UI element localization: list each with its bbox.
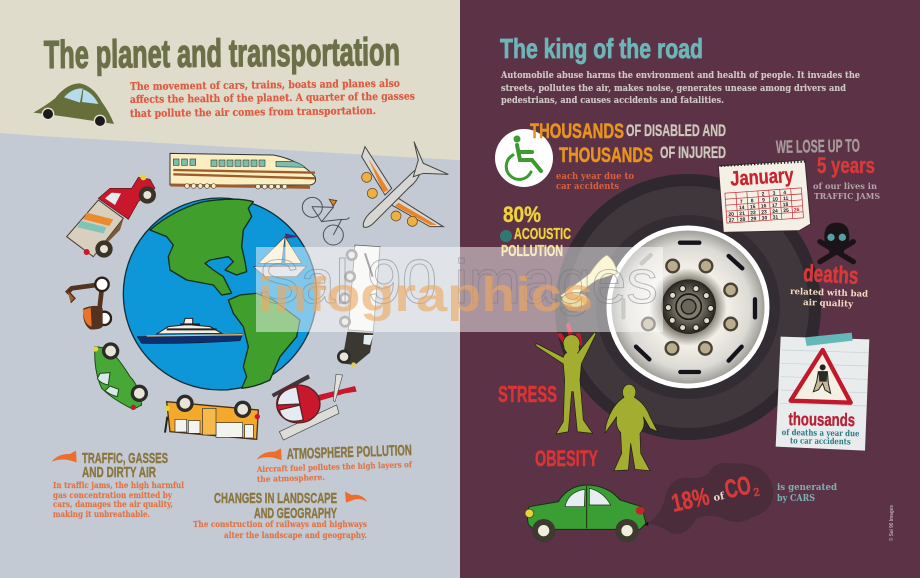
panel: king of the road background bbox=[460, 0, 920, 578]
icon: airplane bbox=[362, 142, 448, 227]
stat: we lose up to 5 years: of our lives in bbox=[813, 182, 877, 192]
icon: school bus bbox=[165, 396, 260, 439]
icon: january calendar: January bbox=[730, 164, 795, 191]
credit: copyright: © Sal 90 Images bbox=[888, 505, 895, 541]
text: is generated by cars bbox=[777, 482, 837, 504]
stat: 18% of CO2 bbox=[668, 468, 762, 518]
note: traffic, gasses and dirty air: In traffic jams, the high harmful bbox=[53, 480, 184, 490]
text: planet introduction: affects the health of the planet. A quarter of the gasses bbox=[130, 91, 415, 106]
icon: january calendar: 28 bbox=[740, 217, 746, 223]
note: changes in landscape and geography bbox=[193, 490, 367, 540]
text: king of the road introduction bbox=[500, 70, 860, 106]
icon: january calendar: 9 bbox=[762, 197, 765, 204]
text: king of the road introduction: Automobile abuse harms the environment and health of people. It invades the bbox=[500, 70, 860, 81]
stat: 80% acoustic pollution: 80% bbox=[503, 202, 541, 227]
icon: olive car bbox=[33, 83, 114, 127]
icon: wheelchair badge bbox=[495, 129, 553, 187]
arrow: atmosphere note bbox=[257, 448, 282, 460]
watermark: infographics: infographics bbox=[258, 269, 593, 322]
icon: january calendar: 14 bbox=[739, 205, 745, 211]
label: obesity: OBESITY bbox=[535, 446, 598, 471]
text: planet introduction bbox=[130, 78, 415, 120]
stat: thousands disabled and injured: OF DISABLED AND bbox=[626, 121, 726, 140]
note: atmosphere pollution: Aircraft fuel pollutes the high layers of bbox=[256, 459, 412, 474]
note: traffic, gasses and dirty air: cars, damages the air quality, bbox=[53, 499, 173, 509]
icon: helicopter bbox=[272, 374, 357, 440]
text: is generated by cars: by CARS bbox=[777, 493, 815, 504]
icon: january calendar: 3 bbox=[772, 191, 776, 197]
title: the planet and transportation: The planet and transportation bbox=[44, 31, 400, 77]
note: changes in landscape and geography: The construction of railways and highways bbox=[193, 519, 367, 529]
stat: 18% of CO2: of bbox=[712, 491, 726, 504]
icon: january calendar bbox=[718, 160, 811, 232]
note: changes in landscape and geography: alter the landscape and geography. bbox=[224, 530, 367, 540]
stat: deaths related with bad air quality bbox=[790, 260, 868, 310]
note: traffic, gasses and dirty air: making it unbreathable. bbox=[53, 509, 150, 519]
icon: train bbox=[170, 153, 316, 189]
icon: white truck bbox=[338, 245, 380, 367]
stat: we lose up to 5 years: TRAFFIC JAMS bbox=[814, 192, 880, 202]
icon: green car bbox=[525, 485, 648, 539]
stat: 80% acoustic pollution bbox=[500, 202, 571, 260]
note: changes in landscape and geography: CHANGES IN LANDSCAPE bbox=[214, 490, 337, 507]
icon: green car bbox=[93, 344, 146, 410]
icon: january calendar: 17 bbox=[772, 203, 778, 209]
arrow: traffic note bbox=[52, 451, 77, 462]
stat: thousands disabled and injured bbox=[530, 120, 726, 192]
note: pedestrian deaths warning: of deaths a year due bbox=[782, 427, 859, 438]
icon: january calendar: 2 bbox=[762, 191, 765, 198]
note: atmosphere pollution bbox=[256, 442, 412, 484]
arrow: landscape note bbox=[345, 492, 367, 503]
icon: scooter bbox=[67, 278, 111, 329]
illustration: tire and wheel bbox=[555, 174, 821, 440]
text: is generated by cars: is generated bbox=[777, 482, 837, 493]
icon: january calendar: 25 bbox=[783, 208, 789, 214]
note: traffic, gasses and dirty air: TRAFFIC, GASSES bbox=[82, 450, 168, 467]
icon: bicycle bbox=[302, 197, 349, 245]
icon: stressed figure bbox=[536, 325, 596, 434]
icon: exhaust cloud bbox=[648, 463, 773, 534]
note: traffic, gasses and dirty air: AND DIRTY AIR bbox=[82, 464, 156, 481]
icon: january calendar: 20 bbox=[728, 212, 734, 218]
stat: we lose up to 5 years bbox=[776, 136, 880, 202]
stat: we lose up to 5 years: 5 years bbox=[817, 153, 875, 178]
stat: 18% of CO2: 18% bbox=[669, 482, 712, 518]
icon: january calendar: 31 bbox=[773, 215, 779, 221]
text: planet introduction: The movement of cars, trains, boats and planes also bbox=[130, 78, 400, 93]
icon: january calendar: 24 bbox=[772, 209, 778, 215]
note: pedestrian deaths warning: to car accidents bbox=[790, 435, 851, 446]
icon: january calendar: 8 bbox=[751, 198, 754, 204]
icon: january calendar: 16 bbox=[761, 203, 767, 210]
icon: red truck bbox=[67, 174, 156, 258]
note: pedestrian deaths warning bbox=[776, 333, 869, 451]
wheel hub bbox=[661, 279, 716, 334]
icon: january calendar: 27 bbox=[729, 218, 735, 224]
stat: thousands disabled and injured: THOUSANDS bbox=[559, 144, 653, 167]
note: traffic, gasses and dirty air bbox=[52, 450, 184, 519]
illustration: globe and vehicles bbox=[67, 142, 448, 440]
icon: january calendar: 10 bbox=[772, 197, 778, 203]
stat: thousands disabled and injured: each year due to bbox=[556, 172, 634, 182]
watermark: infographics: Sal 90 images bbox=[258, 248, 658, 317]
note: pedestrian deaths warning: thousands bbox=[788, 409, 855, 430]
stat: 80% acoustic pollution: ACOUSTIC bbox=[514, 226, 571, 243]
icon: january calendar: 11 bbox=[783, 196, 789, 202]
icon: horn bbox=[560, 255, 617, 307]
icon: january calendar: 29 bbox=[751, 216, 757, 222]
stat: 18% of CO2: 2 bbox=[752, 485, 762, 500]
wheel slots bbox=[623, 243, 755, 372]
icon: january calendar: 4 bbox=[783, 190, 787, 196]
icon: january calendar: 30 bbox=[762, 215, 768, 222]
stat: 80% acoustic pollution: POLLUTION bbox=[501, 243, 563, 260]
wheel lug nuts bbox=[642, 260, 737, 355]
icon: skull and crossbones bbox=[820, 223, 853, 262]
icon: cruise ship bbox=[137, 318, 243, 343]
stat: we lose up to 5 years: WE LOSE UP TO bbox=[776, 136, 860, 157]
icon: january calendar: 15 bbox=[750, 204, 756, 210]
icon: sailboat bbox=[253, 233, 307, 277]
icon: obese figure bbox=[605, 384, 658, 471]
note: changes in landscape and geography: AND GEOGRAPHY bbox=[254, 505, 337, 522]
label: stress: STRESS bbox=[498, 381, 557, 407]
stat: deaths related with bad air quality: related with bad bbox=[790, 287, 868, 300]
icon: globe bbox=[123, 198, 317, 390]
stat: deaths related with bad air quality: air quality bbox=[803, 298, 854, 310]
stat: thousands disabled and injured: THOUSANDS bbox=[530, 120, 624, 143]
icon: january calendar: 21 bbox=[739, 211, 745, 217]
icon: january calendar: 18 bbox=[783, 202, 789, 208]
icon: january calendar: 7 bbox=[740, 199, 743, 205]
panel: planet background bbox=[0, 0, 460, 578]
stat: deaths related with bad air quality: deaths bbox=[803, 260, 859, 290]
stat: 18% of CO2: CO bbox=[722, 470, 754, 504]
note: traffic, gasses and dirty air: gas concentration emitted by bbox=[53, 490, 172, 500]
text: king of the road introduction: pedestrians, and causes accidents and fatalities. bbox=[501, 95, 724, 106]
stat: thousands disabled and injured: OF INJURED bbox=[660, 143, 726, 162]
text: planet introduction: that pollute the air comes from transportation. bbox=[130, 105, 376, 120]
text: king of the road introduction: streets, pollutes the air, makes noise, generates unease among drivers and bbox=[501, 83, 846, 94]
icon: january calendar: 26 bbox=[794, 207, 800, 213]
icon: january calendar: 22 bbox=[750, 210, 756, 216]
note: atmosphere pollution: the atmosphere. bbox=[257, 472, 325, 484]
note: atmosphere pollution: ATMOSPHERE POLLUTION bbox=[287, 442, 412, 463]
title: the king of the road: The king of the road bbox=[500, 33, 703, 64]
icon: january calendar: 23 bbox=[761, 209, 767, 216]
stat: thousands disabled and injured: car accidents bbox=[556, 182, 619, 192]
